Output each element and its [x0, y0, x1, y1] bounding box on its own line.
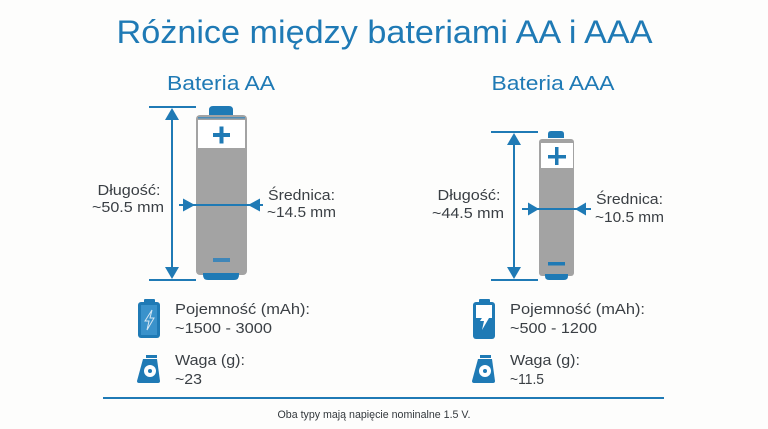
- icon: capacity battery AAA: [473, 299, 495, 339]
- footnote: Oba typy mają napięcie nominalne 1.5 V.: [278, 409, 470, 421]
- diameter label AA: Średnica:: [268, 186, 335, 204]
- diameter dimension arrow AAA: [522, 202, 591, 216]
- weight text AAA: ~11.5: [510, 371, 544, 388]
- capacity text AAA: Pojemność (mAh):: [510, 301, 645, 318]
- heading: Bateria AAA: Bateria AAA: [492, 73, 615, 95]
- capacity text AAA: ~500 - 1200: [510, 320, 597, 337]
- divider line: [103, 397, 664, 399]
- weight text AA: Waga (g):: [175, 352, 245, 369]
- weight text AA: ~23: [175, 371, 202, 388]
- length label AA: ~50.5 mm: [92, 199, 164, 216]
- length dimension arrow AA: [149, 106, 196, 281]
- length dimension arrow AAA: [491, 131, 538, 281]
- length label AAA: Długość:: [438, 187, 500, 204]
- weight text AAA: Waga (g):: [510, 352, 580, 369]
- capacity text AA: ~1500 - 3000: [175, 320, 272, 337]
- title: Różnice między bateriami AA i AAA: [116, 14, 653, 50]
- length label AA: Długość:: [98, 182, 160, 199]
- capacity text AA: Pojemność (mAh):: [175, 301, 310, 318]
- battery illustration AA: [196, 106, 247, 280]
- icon: scale AAA: [472, 355, 495, 383]
- diameter label AAA: ~10.5 mm: [595, 209, 664, 226]
- diameter label AAA: Średnica:: [596, 190, 663, 208]
- length label AAA: ~44.5 mm: [432, 205, 504, 222]
- battery illustration AAA: [539, 131, 574, 280]
- heading: Bateria AA: Bateria AA: [167, 73, 276, 95]
- panel: AAA battery: [432, 73, 664, 388]
- diameter label AA: ~14.5 mm: [267, 204, 336, 221]
- diameter dimension arrow AA: [179, 198, 263, 212]
- icon: capacity battery AA: [138, 299, 160, 338]
- icon: scale AA: [137, 355, 160, 383]
- panel: AA battery: [92, 73, 336, 388]
